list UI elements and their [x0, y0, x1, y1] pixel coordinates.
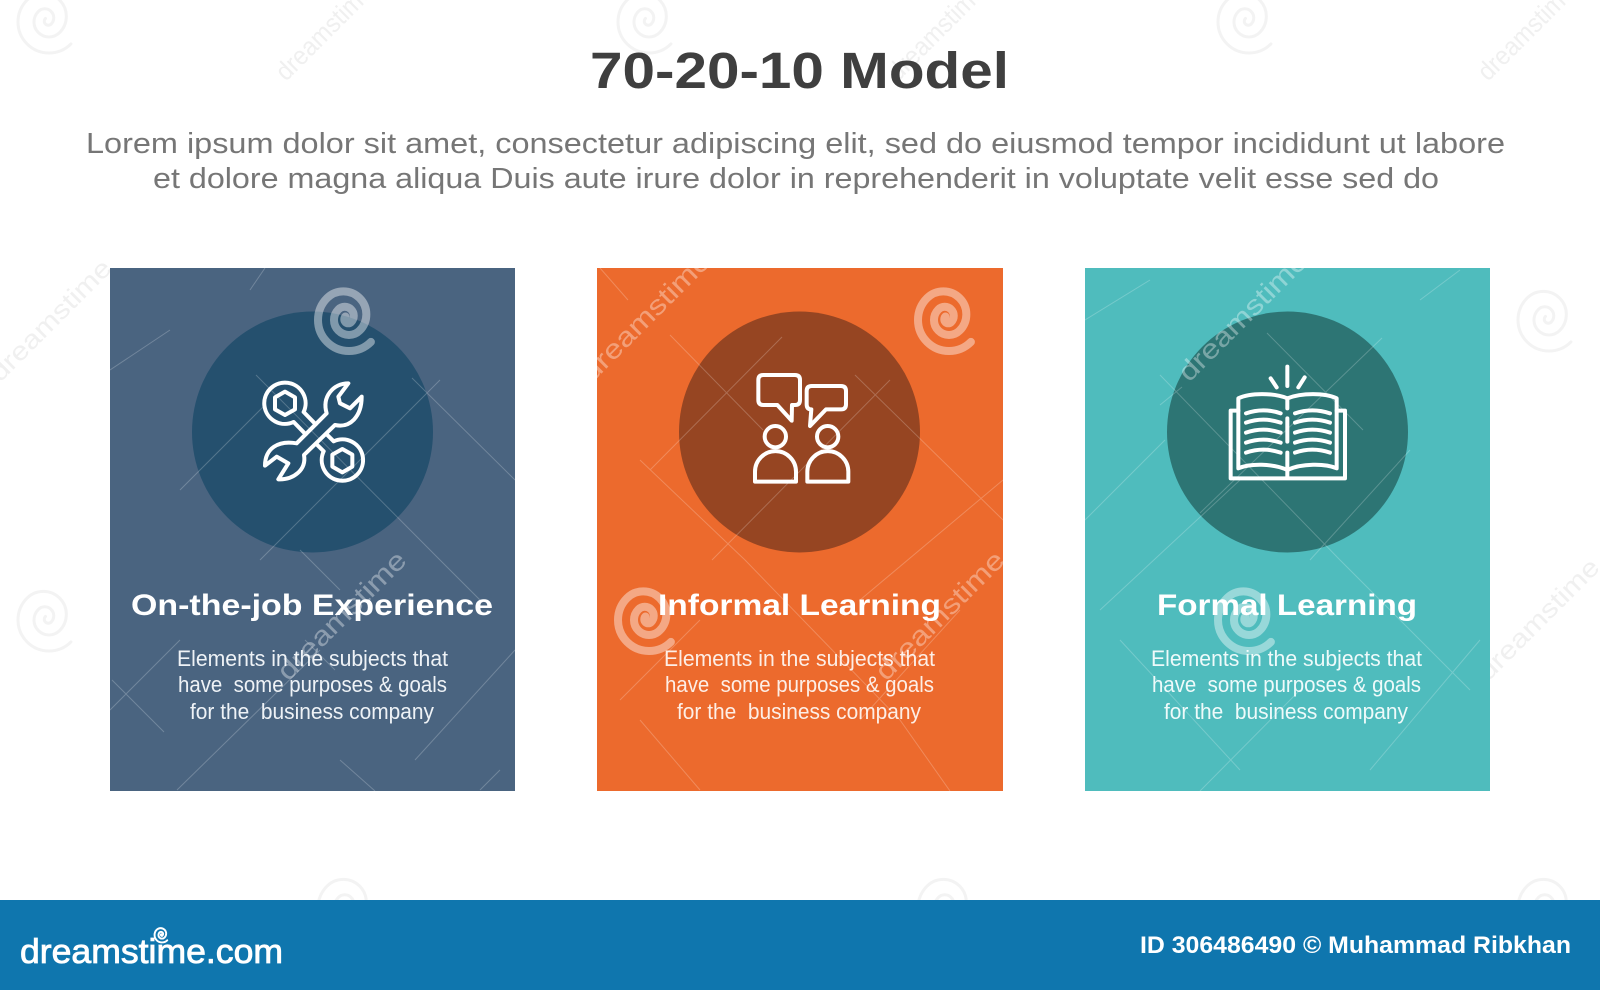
description: formal learning: have some purposes & goals — [1152, 672, 1421, 697]
footer credit: ID 306486490 © Muhammad Ribkhan — [1140, 932, 1571, 959]
description: informal learning: have some purposes & goals — [665, 672, 934, 697]
footer logo: dreamstime.com — [20, 933, 283, 971]
watermark overlay on panels: dreamstime — [575, 246, 716, 387]
panel: formal learning — [1085, 268, 1490, 791]
description: on-the-job experience: for the business company — [190, 699, 434, 724]
panel: informal learning — [597, 268, 1003, 791]
circle: on-the-job icon background — [192, 312, 433, 552]
description: on-the-job experience: have some purposes & goals — [178, 672, 447, 697]
heading: informal learning: Informal Learning — [658, 589, 941, 622]
description: formal learning — [1151, 646, 1422, 724]
description: informal learning: Elements in the subjects that — [664, 646, 935, 671]
panel: on-the-job experience — [110, 268, 515, 791]
heading: formal learning: Formal Learning — [1157, 589, 1417, 622]
watermark overlay on panels: dreamstime — [869, 545, 1010, 686]
icon: crossed wrenches — [264, 383, 363, 481]
icon: two people talking — [755, 375, 848, 482]
description: formal learning: for the business company — [1164, 699, 1408, 724]
description: on-the-job experience: Elements in the subjects that — [177, 646, 448, 671]
circle: formal icon background — [1167, 312, 1408, 552]
background watermark on white: dreamstime — [1471, 552, 1600, 686]
watermark overlay on panels — [110, 246, 1480, 791]
description: formal learning: Elements in the subjects that — [1151, 646, 1422, 671]
icon: open book — [1231, 367, 1345, 478]
description: on-the-job experience — [177, 646, 448, 724]
description: informal learning: for the business company — [677, 699, 921, 724]
circle: informal icon background — [679, 312, 920, 552]
description: informal learning — [664, 646, 935, 724]
subtitle text — [86, 128, 1505, 195]
subtitle text: et dolore magna aliqua Duis aute irure dolor in reprehenderit in voluptate velit esse sed do — [153, 163, 1439, 195]
watermark overlay on panels: dreamstime — [271, 545, 412, 686]
heading: on-the-job experience: On-the-job Experience — [131, 589, 493, 622]
subtitle text: Lorem ipsum dolor sit amet, consectetur adipiscing elit, sed do eiusmod tempor incididunt ut labore — [86, 128, 1505, 160]
footer bar — [0, 900, 1600, 990]
title: 70-20-10 Model — [590, 42, 1009, 99]
watermark overlay on panels: dreamstime — [1172, 246, 1313, 387]
